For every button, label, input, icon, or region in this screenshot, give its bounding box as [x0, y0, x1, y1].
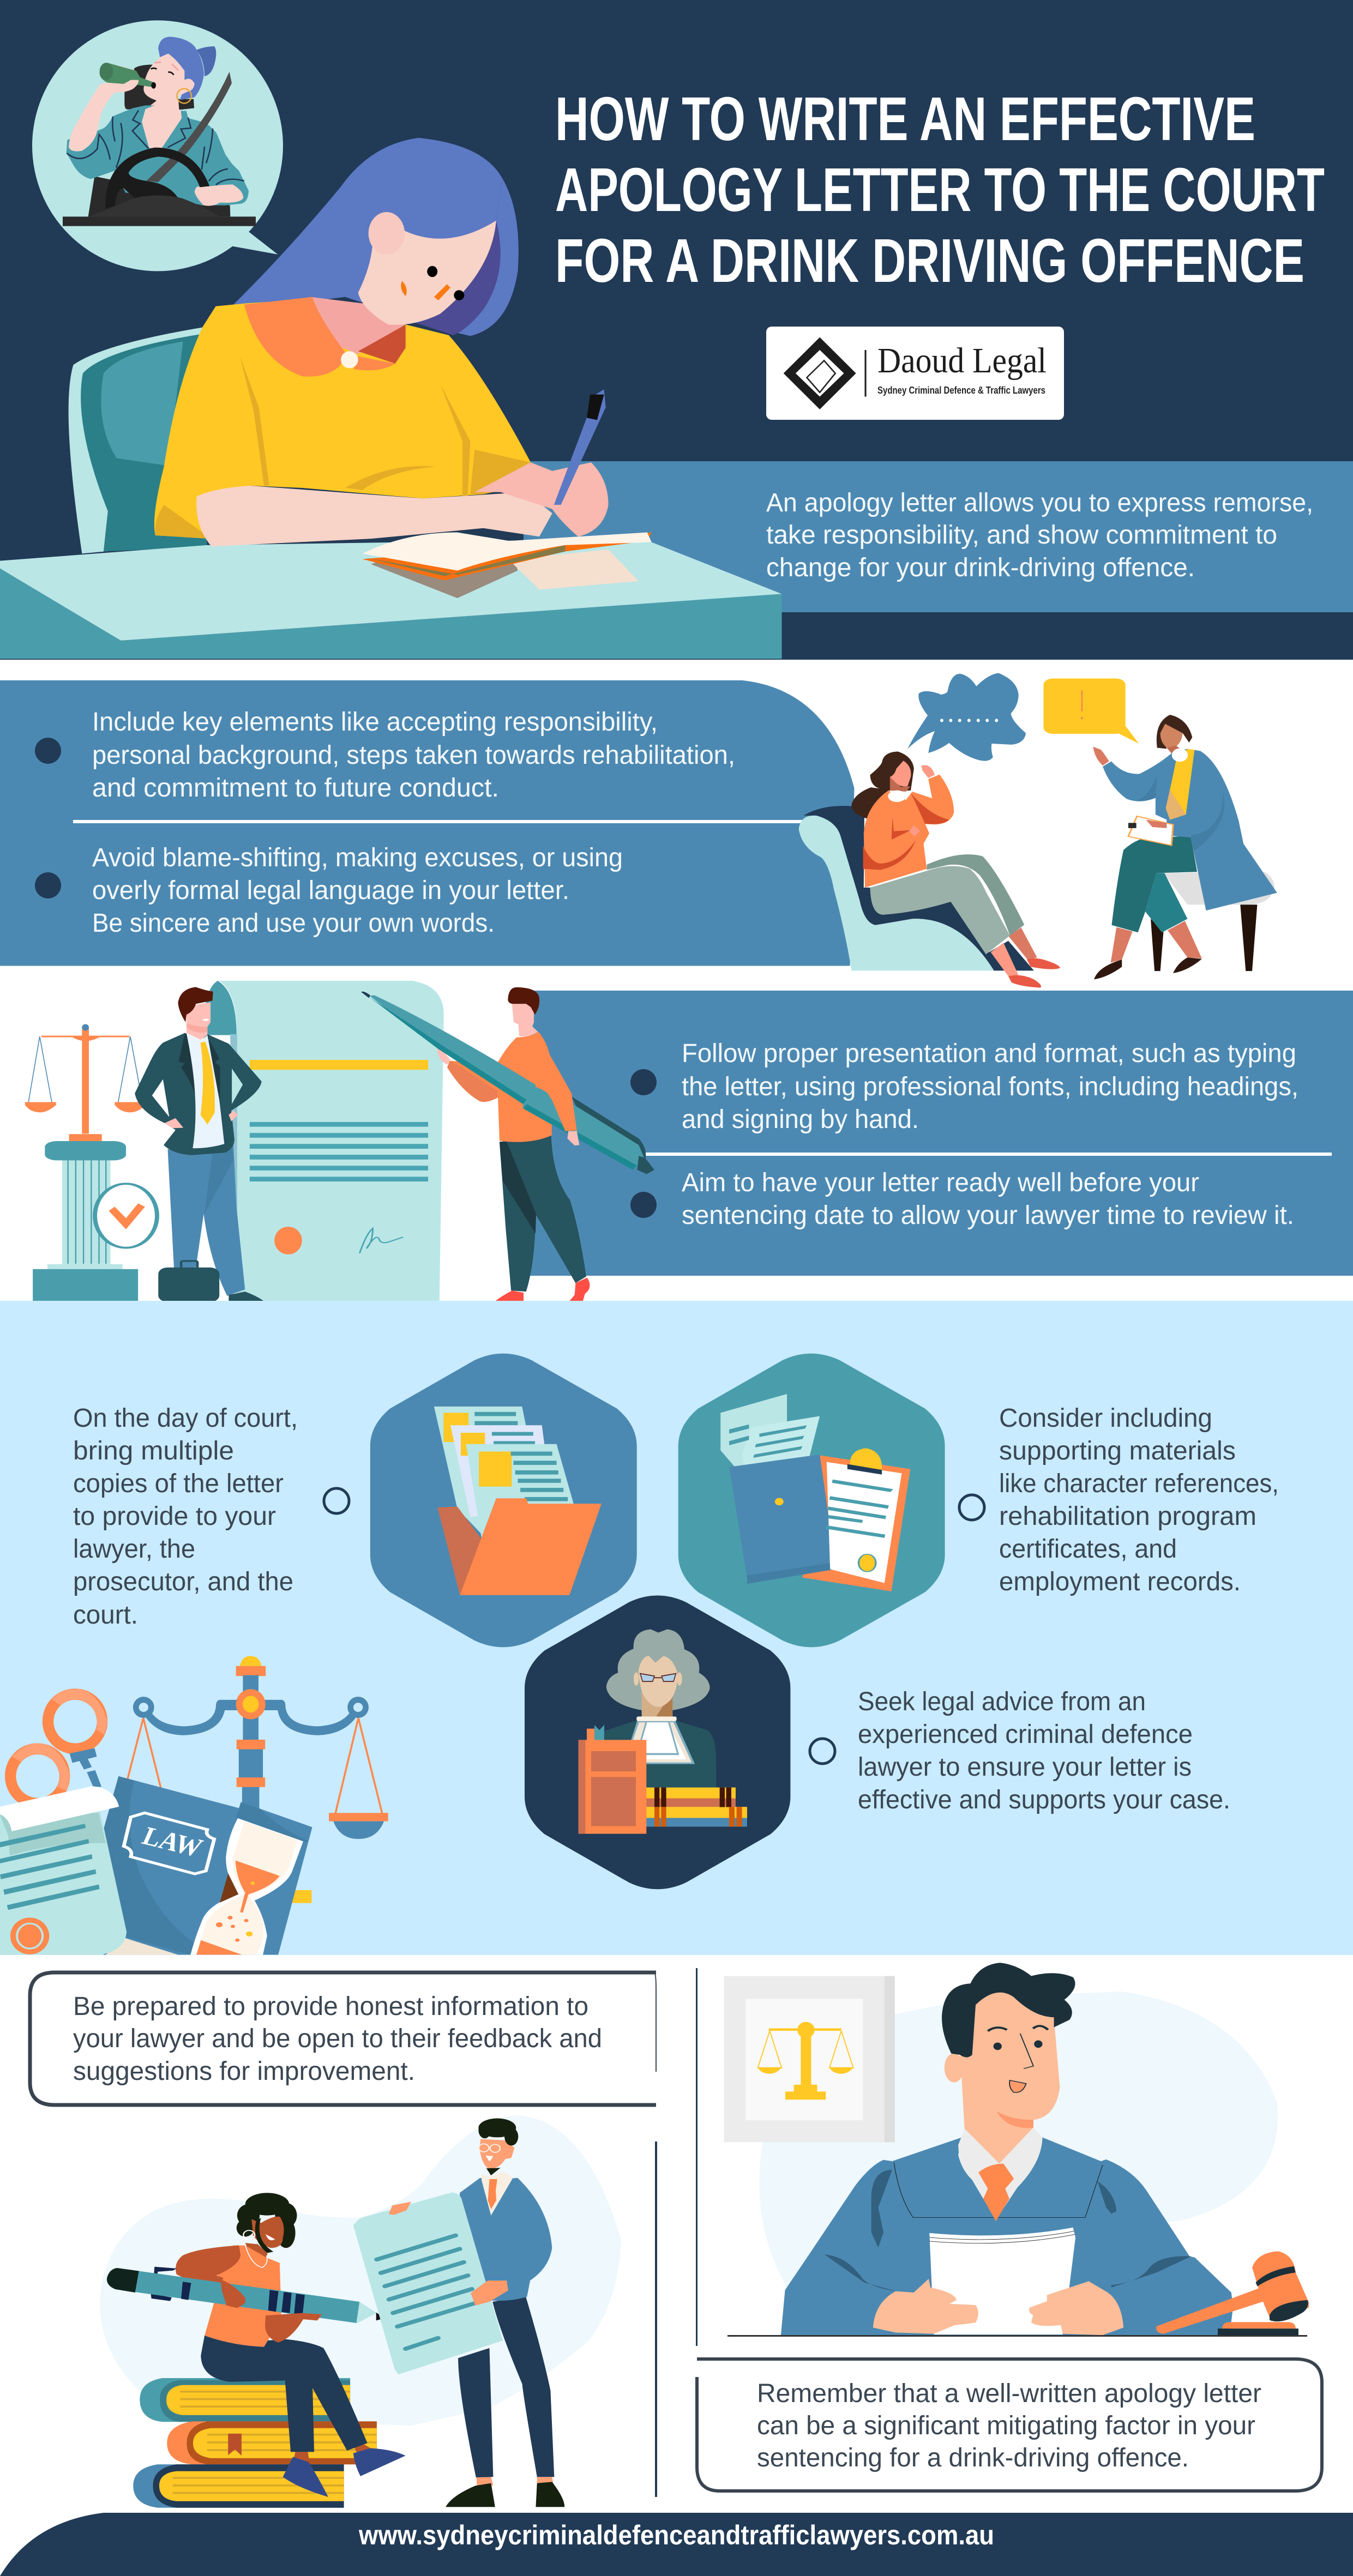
text: avoid blame: overly formal legal language in your letter.: [92, 876, 569, 905]
text: bring copies: bring multiple: [73, 1437, 234, 1465]
panel: presentation and timing: [530, 991, 1353, 1276]
standing counsellor: [1093, 715, 1277, 979]
chair: [69, 327, 207, 553]
collar: [244, 297, 406, 377]
neck: [311, 297, 406, 354]
intro text: take responsibility, and show commitment to: [766, 521, 1277, 550]
text: seek legal advice: [858, 1687, 1230, 1814]
text: supporting materials: rehabilitation program: [999, 1502, 1256, 1531]
dashboard bar: [63, 216, 256, 226]
seat belt: [146, 72, 232, 182]
face details: [151, 62, 191, 103]
judge figure and books: [579, 1630, 747, 1834]
stool: [1151, 872, 1274, 971]
text: timing: [682, 1168, 1294, 1230]
text: bring copies: copies of the letter: [73, 1469, 284, 1498]
sleeve over pen: [534, 1032, 579, 1145]
bubble: [32, 20, 283, 271]
intro text: An apology letter allows you to express remorse,: [766, 488, 1313, 517]
steering wheel: [105, 148, 209, 209]
text: supporting materials: supporting materials: [999, 1437, 1236, 1465]
header band: [524, 461, 1353, 612]
bullet dot: [630, 1192, 657, 1218]
text: timing: sentencing date to allow your lawyer time to review it.: [682, 1201, 1294, 1230]
stack of books: [646, 1788, 747, 1827]
text: presentation: the letter, using professional fonts, including headings,: [682, 1072, 1298, 1101]
background blob: [759, 1992, 1278, 2334]
vertical divider: [696, 1968, 697, 2346]
text: bring copies: On the day of court,: [73, 1404, 298, 1433]
check badge: [95, 1184, 157, 1248]
text: bring copies: court.: [73, 1601, 138, 1630]
text: presentation: and signing by hand.: [682, 1105, 919, 1134]
text: supporting materials: employment records.: [999, 1567, 1241, 1596]
callout: remember: [697, 2359, 1322, 2491]
right hand: [474, 462, 609, 536]
callout: remember: can be a significant mitigating factor in your: [757, 2411, 1255, 2440]
illustration: client and counsellor talking: [799, 673, 1277, 988]
hand on wheel: [195, 184, 243, 206]
face: [358, 212, 496, 325]
footer: www.sydneycriminaldefenceandtrafficlawyers.com.au: [358, 2520, 994, 2550]
seated woman: [851, 751, 1060, 988]
driver seat and hair: [88, 64, 230, 216]
seated client: [176, 2193, 406, 2497]
logo: Daoud Legal: Daoud Legal: [877, 341, 1047, 381]
man with big pen: [437, 987, 590, 1302]
callout: remember: sentencing for a drink-driving offence.: [757, 2444, 1189, 2472]
text: key elements: and commitment to future conduct.: [92, 774, 499, 803]
vertical divider: [655, 2141, 657, 2497]
thought bubble illustration: woman drinking while driving: [32, 20, 283, 271]
text: bring copies: [73, 1404, 298, 1630]
pen: [554, 389, 606, 505]
text: seek legal advice: experienced criminal defence: [858, 1720, 1193, 1749]
frame scales icon: [757, 2022, 853, 2100]
standing orange book: [579, 1725, 646, 1834]
bullet dot: [35, 738, 61, 764]
handcuffs: [5, 1688, 107, 1809]
shirt: [67, 105, 249, 206]
text: bring copies: lawyer, the: [73, 1535, 195, 1564]
pillar and scales: [25, 1024, 146, 1302]
signature: [359, 1228, 403, 1253]
text: seek legal advice: effective and supports your case.: [858, 1785, 1230, 1814]
head and neck: [942, 1963, 1075, 2164]
raised arm: [69, 85, 115, 151]
briefcase: [158, 1261, 219, 1302]
text lines: [250, 1122, 428, 1181]
law book: [103, 1776, 312, 1955]
text: key elements: Include key elements like accepting responsibility,: [92, 708, 658, 737]
text: seek legal advice: Seek legal advice from an: [858, 1687, 1146, 1716]
hourglass: [190, 1802, 312, 1955]
intro text: change for your drink-driving offence.: [766, 553, 1195, 582]
clipboard and envelope: [720, 1394, 910, 1591]
standing lawyer: [446, 2119, 564, 2507]
logo mark: [784, 337, 867, 409]
text: supporting materials: [999, 1404, 1279, 1596]
folder and papers: [434, 1407, 602, 1595]
illustration: law book, scales, handcuffs, hourglass, scroll: [0, 1656, 388, 1955]
illustration: judge background and picture: [724, 1976, 1278, 2334]
text: supporting materials: certificates, and: [999, 1535, 1177, 1564]
logo: Daoud Legal: [766, 327, 1064, 420]
gavel: [1156, 2251, 1309, 2335]
bottle and hand: [100, 63, 156, 93]
text: key elements: [92, 708, 735, 803]
callout: remember: Remember that a well-written apology letter: [757, 2379, 1261, 2408]
judge: [604, 1630, 716, 1788]
callout: be prepared: Be prepared to provide honest information to: [73, 1992, 588, 2021]
law book: LAW: [138, 1821, 207, 1862]
armchair: [799, 806, 1034, 970]
speech box yellow: [1043, 679, 1139, 744]
illustration: pillar, scales and check badge: [25, 1024, 157, 1302]
text: supporting materials: Consider including: [999, 1404, 1212, 1433]
ring bullet: [810, 1739, 835, 1764]
certificate scroll: [0, 1786, 127, 1955]
callout: be prepared: your lawyer and be open to their feedback and: [73, 2024, 602, 2053]
callout: be prepared: suggestions for improvement.: [73, 2057, 415, 2086]
bullet dot: [35, 872, 61, 898]
logo: Daoud Legal: Sydney Criminal Defence & Traffic Lawyers: [877, 385, 1045, 396]
desk: [0, 539, 782, 659]
yellow blouse: [154, 299, 552, 539]
text: bring copies: to provide to your: [73, 1502, 276, 1531]
text: timing: Aim to have your letter ready well before your: [682, 1168, 1199, 1197]
hexagon: documents in folder: [288, 1066, 637, 1647]
open book: [363, 533, 652, 598]
letter page: [353, 2192, 508, 2374]
text: presentation: Follow proper presentation and format, such as typing: [682, 1039, 1296, 1068]
stack of books: [133, 2378, 377, 2508]
text: avoid blame: Be sincere and use your own words.: [92, 909, 495, 938]
panel: court day and supporting materials background: [0, 1301, 1353, 1955]
forearm: [196, 486, 552, 546]
bullet dot: [630, 1069, 657, 1095]
hair: [226, 138, 519, 336]
text: avoid blame: Avoid blame-shifting, making excuses, or using: [92, 843, 623, 872]
dashboard: [89, 195, 220, 216]
text: bring copies: prosecutor, and the: [73, 1567, 293, 1596]
intro text: [766, 488, 1313, 582]
judge robe: [781, 2137, 1233, 2335]
blue cap and bow: [158, 37, 216, 100]
neck and face: [142, 53, 195, 148]
man in suit: [135, 987, 264, 1302]
illustration: lawyers with document and big pen: [135, 987, 654, 1302]
illustration: judge with document and gavel: [781, 1963, 1309, 2335]
speech blob: [907, 673, 1026, 761]
illustration: large document scroll: [204, 981, 444, 1302]
big pen: [361, 992, 654, 1174]
callout: be prepared: [30, 1972, 656, 2105]
shirt folds: [67, 111, 244, 184]
document: [929, 2228, 1075, 2334]
collar and tie: [958, 2127, 1043, 2221]
text: seek legal advice: lawyer to ensure your letter is: [858, 1753, 1192, 1782]
footer: [0, 2513, 1353, 2576]
ring bullet: [324, 1488, 349, 1513]
text: supporting materials: like character references,: [999, 1469, 1279, 1498]
background blob: [100, 2115, 621, 2426]
header panel background: [0, 0, 1353, 660]
hexagon: judge with books: [525, 1596, 790, 1889]
framed scales picture: [724, 1976, 895, 2142]
text: key elements: personal background, steps taken towards rehabilitation,: [92, 741, 735, 770]
illustration: client with pen and lawyer with letter: [100, 2115, 621, 2508]
blouse folds: [155, 357, 552, 539]
text: avoid blame: [92, 843, 623, 938]
title: [555, 85, 1325, 295]
ring bullet: [959, 1495, 984, 1520]
hands: [873, 2279, 1123, 2335]
panel: key elements: [0, 680, 854, 966]
hexagon: supporting materials: [678, 1354, 945, 1647]
text: presentation: [682, 1039, 1298, 1134]
illustration: woman writing at desk: [0, 138, 782, 659]
seal: [274, 1227, 302, 1254]
yellow heading bar: [250, 1060, 428, 1070]
big pen held by client: [107, 2267, 385, 2343]
scales: [128, 1656, 388, 1903]
